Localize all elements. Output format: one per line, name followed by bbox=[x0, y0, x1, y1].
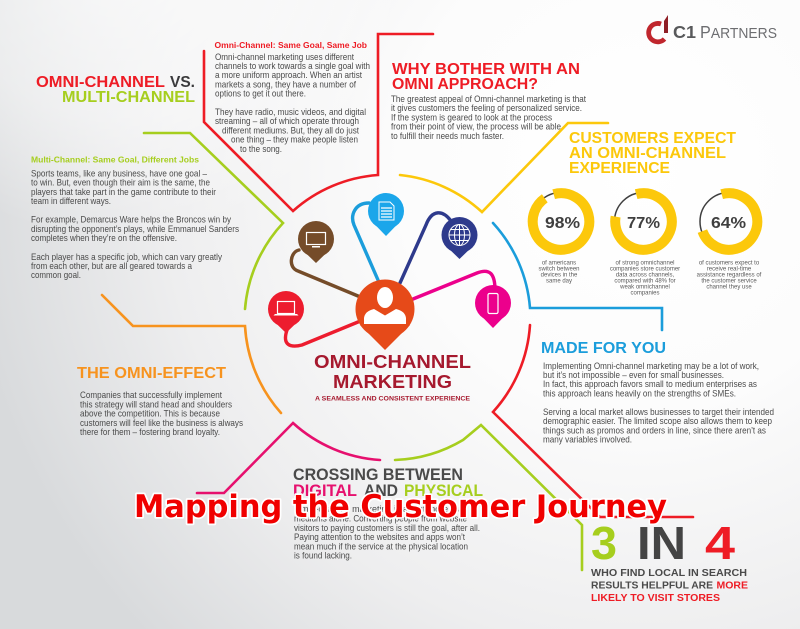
section: why bother with an omni approach: WHY BOTHER WITH AN bbox=[392, 61, 580, 78]
text block: multi-channel same goal: completes when they’re on the offensive. bbox=[31, 233, 177, 243]
section: made for you: this approach leans heavily on the strengths of SMEs. bbox=[543, 388, 736, 398]
center title: omni-channel marketing: A SEAMLESS AND CONSISTENT EXPERIENCE bbox=[315, 396, 471, 402]
section: crossing between digital and physical: DIGITAL bbox=[293, 482, 357, 500]
center title: omni-channel marketing bbox=[314, 351, 471, 402]
section: the omni-effect: above the competition. This is because bbox=[80, 408, 220, 418]
heading: customers expect: AN OMNI-CHANNEL bbox=[569, 145, 726, 162]
section: crossing between digital and physical: CROSSING BETWEEN bbox=[293, 466, 463, 484]
section: made for you: In fact, this approach favors small to medium enterprises as bbox=[543, 379, 757, 389]
text block: omni-channel same goal: markets a song, they have a number of bbox=[215, 80, 356, 90]
text block: multi-channel same goal: common goal. bbox=[31, 270, 81, 280]
center title: omni-channel marketing: MARKETING bbox=[333, 371, 452, 392]
donut chart: 64%: the customer service bbox=[701, 278, 757, 284]
donut chart: 77%: of strong omnichannel bbox=[615, 260, 675, 266]
section: the omni-effect: THE OMNI-EFFECT bbox=[77, 365, 227, 382]
section: crossing between digital and physical: mean much if the service at the physical location bbox=[294, 542, 468, 552]
text block: omni-channel same goal: They have radio, music videos, and digital bbox=[215, 107, 366, 117]
stat: 3 in 4: RESULTS HELPFUL ARE bbox=[591, 580, 713, 592]
section: made for you: Implementing Omni-channel marketing may be a lot of work, bbox=[543, 361, 759, 371]
section: the omni-effect: there for them – fostering brand loyalty. bbox=[80, 427, 220, 437]
section: why bother with an omni approach: to fulfill their needs much faster. bbox=[391, 131, 504, 141]
icon: monitor pin bbox=[298, 221, 334, 263]
text block: multi-channel same goal: Sports teams, like any business, have one goal – bbox=[31, 168, 208, 178]
stat: 3 in 4: 3 bbox=[591, 517, 617, 569]
text block: multi-channel same goal: For example, Demarcus Ware helps the Broncos win by bbox=[31, 214, 231, 224]
donut chart: 64%: receive real-time bbox=[707, 266, 752, 272]
icon: phone pin bbox=[475, 285, 511, 328]
text block: omni-channel same goal bbox=[214, 41, 370, 154]
donut chart: 98%: devices in the bbox=[541, 272, 578, 278]
section: why bother with an omni approach: The greatest appeal of Omni-channel marketing is that bbox=[391, 94, 586, 104]
stat: 3 in 4 bbox=[591, 517, 748, 604]
text block: multi-channel same goal: team in different ways. bbox=[31, 196, 111, 206]
section: crossing between digital and physical bbox=[293, 466, 483, 560]
heading: customers expect bbox=[569, 130, 736, 177]
text block: multi-channel same goal: from each other, but are all geared towards a bbox=[31, 261, 193, 271]
text block: omni-channel same goal: Omni-channel marketing uses different bbox=[215, 52, 354, 62]
heading: omni-channel vs multi-channel bbox=[36, 74, 195, 106]
logo: C1 Partners bbox=[649, 15, 777, 42]
section: crossing between digital and physical: Omni-channel marketing is about more than bbox=[294, 504, 468, 514]
donut chart: 64%: 64% bbox=[711, 215, 746, 232]
logo: C1 Partners: PARTNERS bbox=[700, 22, 777, 42]
text block: multi-channel same goal: Multi-Channel: Same Goal, Different Jobs bbox=[31, 156, 199, 164]
section: the omni-effect: Companies that successfully implement bbox=[80, 390, 222, 400]
donut chart: 77%: data across channels, bbox=[616, 272, 675, 278]
section: crossing between digital and physical: is found lacking. bbox=[294, 550, 352, 560]
section: crossing between digital and physical: Paying attention to the websites and apps won’t bbox=[294, 532, 465, 542]
text block: omni-channel same goal: options to get it out there. bbox=[215, 88, 306, 98]
section: why bother with an omni approach: from their point of view, the process will be able bbox=[391, 122, 561, 132]
section: made for you: demographic easier. The limited scope also allows them to keep bbox=[543, 416, 772, 426]
donut chart: 77%: compared with 48% for bbox=[614, 278, 676, 284]
donut chart: 64% bbox=[694, 187, 764, 290]
section: why bother with an omni approach: If the system is geared to look at the process bbox=[391, 112, 552, 122]
icon: laptop pin bbox=[268, 291, 304, 333]
donut chart: 77%: companies bbox=[630, 290, 660, 296]
text block: omni-channel same goal: different mediums. But, they all do just bbox=[222, 126, 359, 136]
heading: customers expect: CUSTOMERS EXPECT bbox=[569, 130, 736, 147]
heading: omni-channel vs multi-channel: OMNI-CHANNEL bbox=[36, 74, 165, 91]
text block: multi-channel same goal: disrupting the opponent’s plays, while Emmanuel Sanders bbox=[31, 224, 239, 234]
section: made for you: many variables involved. bbox=[543, 434, 632, 444]
donut chart: 77%: weak omnichannel bbox=[619, 284, 670, 290]
text block: multi-channel same goal: players that take part in the game contribute to their bbox=[31, 187, 216, 197]
text block: omni-channel same goal: one thing – they make people listen bbox=[231, 134, 358, 144]
text block: multi-channel same goal: Each player has a specific job, which can vary greatly bbox=[31, 252, 222, 262]
heading: omni-channel vs multi-channel: MULTI-CHANNEL bbox=[62, 89, 195, 106]
stat: 3 in 4: MORE bbox=[716, 580, 748, 592]
icon: document pin bbox=[368, 193, 404, 236]
stat: 3 in 4: WHO FIND LOCAL IN SEARCH bbox=[591, 567, 747, 579]
donut chart: 98% bbox=[526, 187, 596, 284]
donut chart: 64%: of customers expect to bbox=[699, 260, 760, 266]
wires linking device pins to hub bbox=[285, 203, 495, 346]
section: why bother with an omni approach bbox=[391, 61, 586, 141]
section: crossing between digital and physical: PHYSICAL bbox=[404, 482, 483, 500]
icon: globe pin bbox=[442, 217, 478, 259]
stat: 3 in 4: LIKELY TO VISIT STORES bbox=[591, 592, 720, 604]
text block: multi-channel same goal bbox=[31, 156, 239, 280]
section: made for you: but it’s not impossible – even for small businesses. bbox=[543, 370, 724, 380]
section: made for you: things such as promos and orders in line, since there aren’t as bbox=[543, 426, 766, 436]
text block: omni-channel same goal: streaming – all of which operate through bbox=[215, 116, 359, 126]
text block: multi-channel same goal: to win. But, even though their aim is the same, the bbox=[31, 178, 210, 188]
stat: 3 in 4: IN bbox=[637, 517, 686, 569]
connector lines around central circle bbox=[102, 34, 693, 570]
donut chart: 98%: of americans bbox=[542, 260, 576, 266]
donut chart: 98%: same day bbox=[546, 278, 572, 284]
section: the omni-effect bbox=[77, 365, 243, 437]
section: crossing between digital and physical: AND bbox=[364, 482, 398, 500]
text block: omni-channel same goal: channels to work towards a single goal with bbox=[215, 61, 370, 71]
donut chart: 77%: companies store customer bbox=[610, 266, 680, 272]
logo: C1 Partners: C1 bbox=[673, 22, 696, 42]
overlay title: mapping the customer journey: Mapping the Customer Journey bbox=[134, 489, 667, 525]
donut chart: 64%: channel they use bbox=[706, 284, 752, 290]
heading: omni-channel vs multi-channel: VS. bbox=[170, 74, 195, 91]
donut chart: 64%: assistance regardless of bbox=[697, 272, 762, 278]
section: made for you bbox=[541, 340, 774, 444]
section: crossing between digital and physical: mediums alone. Converting people from website bbox=[294, 514, 467, 524]
text block: omni-channel same goal: Omni-Channel: Same Goal, Same Job bbox=[214, 41, 367, 50]
donut chart: 77%: 77% bbox=[627, 215, 660, 232]
heading: customers expect: EXPERIENCE bbox=[569, 160, 670, 177]
text block: omni-channel same goal: a more uniform approach. When an artist bbox=[215, 70, 362, 80]
donut chart: 98%: switch between bbox=[538, 266, 580, 272]
section: why bother with an omni approach: OMNI APPROACH? bbox=[392, 76, 538, 93]
section: the omni-effect: this strategy will stand head and shoulders bbox=[80, 400, 232, 410]
icon: central person pin bbox=[356, 280, 414, 350]
donut chart: 98%: 98% bbox=[545, 215, 580, 232]
donut chart: 77% bbox=[609, 187, 680, 296]
section: why bother with an omni approach: it gives customers the feeling of personalized service. bbox=[391, 103, 582, 113]
stat: 3 in 4: 4 bbox=[705, 517, 735, 569]
section: the omni-effect: customers will feel like the business is always bbox=[80, 418, 243, 428]
section: crossing between digital and physical: visitors to paying customers is still the goal, after all. bbox=[294, 523, 480, 533]
section: made for you: MADE FOR YOU bbox=[541, 340, 666, 357]
center title: omni-channel marketing: OMNI-CHANNEL bbox=[314, 351, 471, 372]
text block: omni-channel same goal: to the song. bbox=[240, 144, 282, 154]
